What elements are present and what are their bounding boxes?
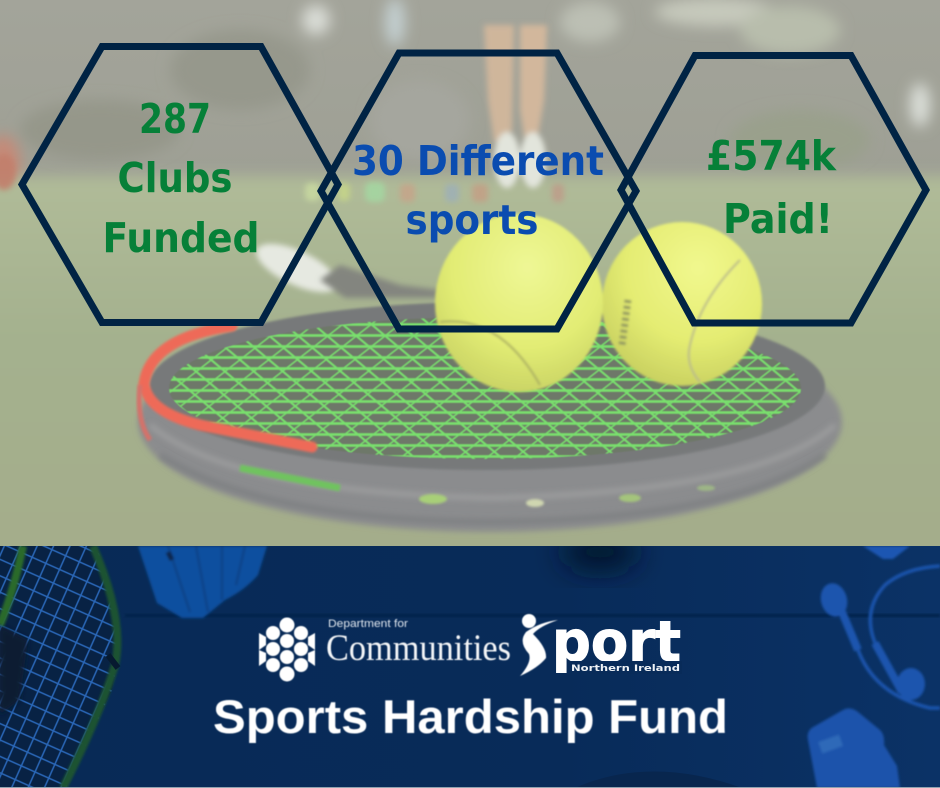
icon: hexagonal crest <box>259 618 315 682</box>
icon: sport figure <box>520 614 558 676</box>
blurred court background <box>0 0 930 195</box>
hexagon: 287 Clubs Funded <box>22 46 338 322</box>
photo panel: tennis racket and balls on grass <box>0 0 940 576</box>
logo: Sport Northern Ireland <box>520 610 682 676</box>
stat: 287 Clubs Funded: Clubs <box>118 154 232 202</box>
stat: 30 Different sports <box>352 137 604 244</box>
green frame logo and holes <box>240 468 715 507</box>
racket strings <box>169 317 801 459</box>
shuttlecock <box>138 546 267 618</box>
tennis balls <box>435 214 762 392</box>
logo: Department for Communities <box>259 618 511 682</box>
stat: 30 Different sports: sports <box>406 196 538 244</box>
dark disc at bottom <box>575 772 742 788</box>
racket <box>138 234 842 532</box>
grass <box>0 176 940 576</box>
stat: 30 Different sports: 30 Different <box>352 137 604 185</box>
logo text: Northern Ireland: Northern Ireland <box>571 664 680 674</box>
badminton racket <box>0 546 118 788</box>
training cones <box>0 154 564 202</box>
footer banner <box>0 534 940 788</box>
banner title: Sports Hardship Fund <box>213 690 728 743</box>
logo text: Communities: Communities <box>326 628 511 669</box>
dark shadows <box>562 534 638 570</box>
earphones <box>817 566 940 708</box>
racket handle cap <box>254 240 336 296</box>
hexagon: 30 Different sports <box>321 53 636 329</box>
red frame section <box>144 326 312 447</box>
stat: 287 Clubs Funded: 287 <box>139 95 211 143</box>
stat: £574k Paid!: Paid! <box>723 195 833 243</box>
racket frame <box>136 387 844 534</box>
stat: £574k Paid! <box>706 132 838 243</box>
hexagon: £574k Paid! <box>621 56 926 323</box>
stat: £574k Paid!: £574k <box>706 132 838 180</box>
logo text: port: port <box>552 610 681 675</box>
player legs <box>484 25 547 188</box>
stat: 287 Clubs Funded: Funded <box>102 214 260 262</box>
water bottle <box>808 546 910 788</box>
stat: 287 Clubs Funded <box>102 95 260 262</box>
panel behind Northern Ireland <box>571 661 680 662</box>
logo text: Department for: Department for <box>328 618 408 630</box>
